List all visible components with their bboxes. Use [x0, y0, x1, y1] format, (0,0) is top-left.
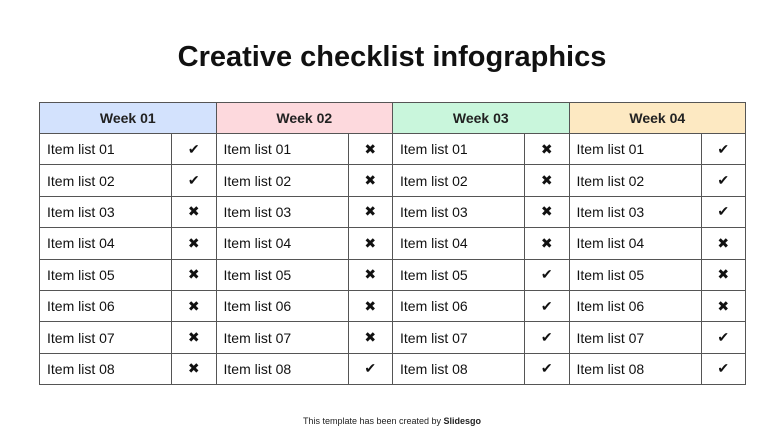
checklist table: ✖: [188, 235, 200, 251]
checklist table: ✔: [717, 141, 729, 157]
checklist table: Item list 03: [576, 204, 644, 220]
checklist table: Item list 06: [224, 298, 291, 314]
checklist table: Item list 01: [400, 141, 468, 157]
checklist table: ✔: [541, 329, 553, 345]
checklist table: ✖: [717, 266, 729, 282]
checklist table: Item list 01: [576, 141, 644, 157]
checklist table: ✖: [717, 235, 729, 251]
checklist table: ✔: [717, 172, 729, 188]
checklist table: Item list 05: [47, 267, 115, 283]
checklist table: Item list 04: [576, 235, 644, 251]
checklist table: Item list 07: [576, 330, 644, 346]
checklist table: Item list 06: [576, 298, 644, 314]
checklist table: Item list 08: [47, 361, 115, 377]
footer credit: This template has been created by Slidesgo: [303, 416, 481, 426]
checklist table: Item list 02: [576, 173, 644, 189]
checklist table: ✔: [541, 266, 553, 282]
checklist table: ✖: [717, 298, 729, 314]
checklist table: ✖: [188, 329, 200, 345]
checklist table: Item list 05: [400, 267, 468, 283]
checklist table: ✖: [188, 266, 200, 282]
checklist table: Week 03: [453, 110, 509, 126]
checklist table: Item list 03: [224, 204, 291, 220]
checklist table: ✖: [541, 203, 553, 219]
checklist table: Item list 01: [224, 141, 291, 157]
checklist table: Item list 08: [224, 361, 291, 377]
checklist table: ✔: [541, 360, 553, 376]
checklist table: Item list 07: [47, 330, 115, 346]
checklist table: Item list 08: [400, 361, 468, 377]
checklist table: Week 01: [100, 110, 156, 126]
checklist table: ✖: [541, 235, 553, 251]
checklist table: Item list 02: [224, 173, 291, 189]
checklist table: ✖: [541, 141, 553, 157]
checklist table: Item list 07: [224, 330, 291, 346]
checklist table: ✖: [364, 235, 376, 251]
checklist table: ✖: [364, 172, 376, 188]
title: Creative checklist infographics: [178, 41, 606, 73]
checklist table: ✖: [541, 172, 553, 188]
checklist table: ✖: [188, 360, 200, 376]
checklist table: Item list 05: [224, 267, 291, 283]
checklist table: ✖: [188, 203, 200, 219]
checklist table: [39, 102, 746, 385]
checklist table: Item list 06: [47, 298, 115, 314]
checklist table: ✖: [364, 203, 376, 219]
checklist table: Item list 07: [400, 330, 468, 346]
checklist table: Item list 04: [47, 235, 115, 251]
checklist table: ✖: [364, 266, 376, 282]
checklist table: ✔: [717, 203, 729, 219]
checklist table: ✔: [717, 329, 729, 345]
checklist table: ✔: [188, 141, 200, 157]
checklist table: Item list 08: [576, 361, 644, 377]
checklist table: ✖: [364, 298, 376, 314]
checklist table: Item list 03: [400, 204, 468, 220]
checklist table: Item list 03: [47, 204, 115, 220]
checklist table: ✔: [541, 298, 553, 314]
checklist table: Item list 01: [47, 141, 115, 157]
checklist table: Item list 05: [576, 267, 644, 283]
checklist table: Week 02: [276, 110, 332, 126]
checklist table: ✔: [188, 172, 200, 188]
checklist table: ✔: [364, 360, 376, 376]
checklist table: ✖: [188, 298, 200, 314]
checklist table: Item list 04: [224, 235, 291, 251]
checklist table: ✔: [717, 360, 729, 376]
checklist table: Item list 02: [47, 173, 115, 189]
checklist table: Week 04: [629, 110, 685, 126]
checklist table: Item list 02: [400, 173, 468, 189]
checklist table: Item list 04: [400, 235, 468, 251]
checklist table: Item list 06: [400, 298, 468, 314]
checklist table: ✖: [364, 329, 376, 345]
checklist table: ✖: [364, 141, 376, 157]
